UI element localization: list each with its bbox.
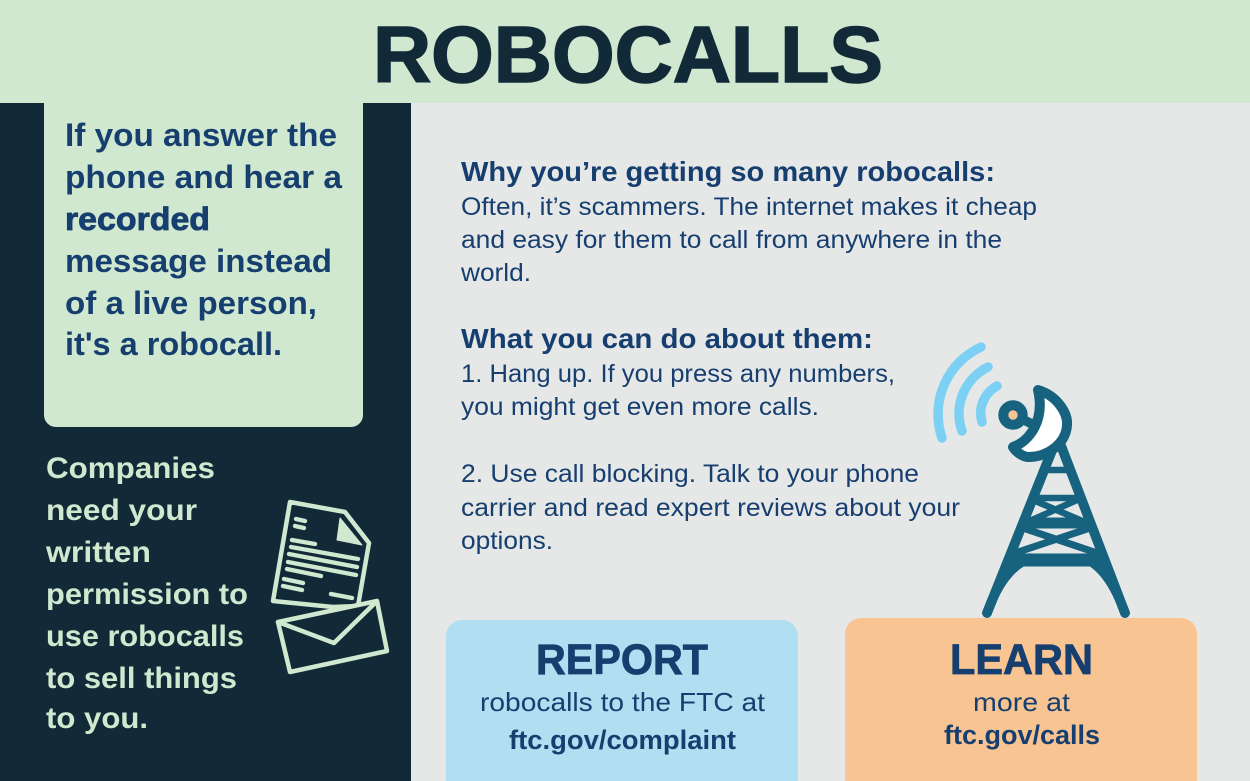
panel: definition card: [44, 103, 363, 427]
text block: definition: phone and hear a: [65, 159, 342, 195]
report text: ftc.gov/complaint: [509, 725, 736, 755]
learn text: more at: [973, 687, 1071, 717]
text block: why so many robocalls: [460, 156, 1037, 287]
text block: what you can do: you might get even more calls.: [461, 393, 819, 421]
text block: definition: it's a robocall.: [65, 326, 282, 362]
header band: [0, 0, 1250, 103]
text block: definition: message instead: [65, 243, 332, 279]
panel: report: [446, 620, 798, 781]
text block: written permission: permission to: [46, 578, 248, 611]
text block: what you can do: 2. Use call blocking. Talk to your phone: [461, 460, 919, 488]
text block: written permission: to sell things: [46, 662, 237, 695]
text block: what you can do: [461, 323, 960, 555]
text block: written permission: to you.: [46, 702, 148, 735]
text block: why so many robocalls: world.: [460, 259, 531, 287]
text block: written permission: need your: [46, 494, 197, 527]
text block: why so many robocalls: Why you’re getting so many robocalls:: [461, 156, 995, 187]
text block: why so many robocalls: and easy for them to call from anywhere in the: [461, 226, 1002, 254]
panel: learn: [845, 618, 1197, 781]
text block: written permission: Companies: [46, 452, 215, 485]
text block: definition: [65, 117, 342, 362]
learn text: LEARN: [950, 636, 1093, 684]
learn text: ftc.gov/calls: [944, 720, 1100, 750]
text block: definition: recorded: [65, 201, 210, 237]
text block: written permission: written: [45, 536, 151, 569]
icon: signal waves: [938, 347, 997, 438]
learn text: [944, 636, 1100, 750]
text block: what you can do: 1. Hang up. If you press any numbers,: [461, 360, 895, 388]
panel: left dark column: [0, 103, 411, 781]
text block: written permission: [45, 452, 248, 735]
report text: REPORT: [536, 636, 708, 684]
text block: definition: If you answer the: [65, 117, 337, 153]
text block: written permission: use robocalls: [46, 620, 244, 653]
text block: what you can do: carrier and read expert reviews about your: [461, 494, 960, 522]
icon: antenna tower: [987, 390, 1125, 613]
text block: definition: of a live person,: [65, 285, 317, 321]
text block: what you can do: options.: [461, 527, 553, 555]
report text: robocalls to the FTC at: [480, 687, 766, 717]
text block: why so many robocalls: Often, it’s scammers. The internet makes it cheap: [461, 193, 1037, 221]
icon: document and envelope: [273, 502, 387, 672]
text block: what you can do: What you can do about them:: [461, 323, 873, 354]
title: ROBOCALLS: [373, 10, 883, 99]
report text: [480, 636, 766, 755]
